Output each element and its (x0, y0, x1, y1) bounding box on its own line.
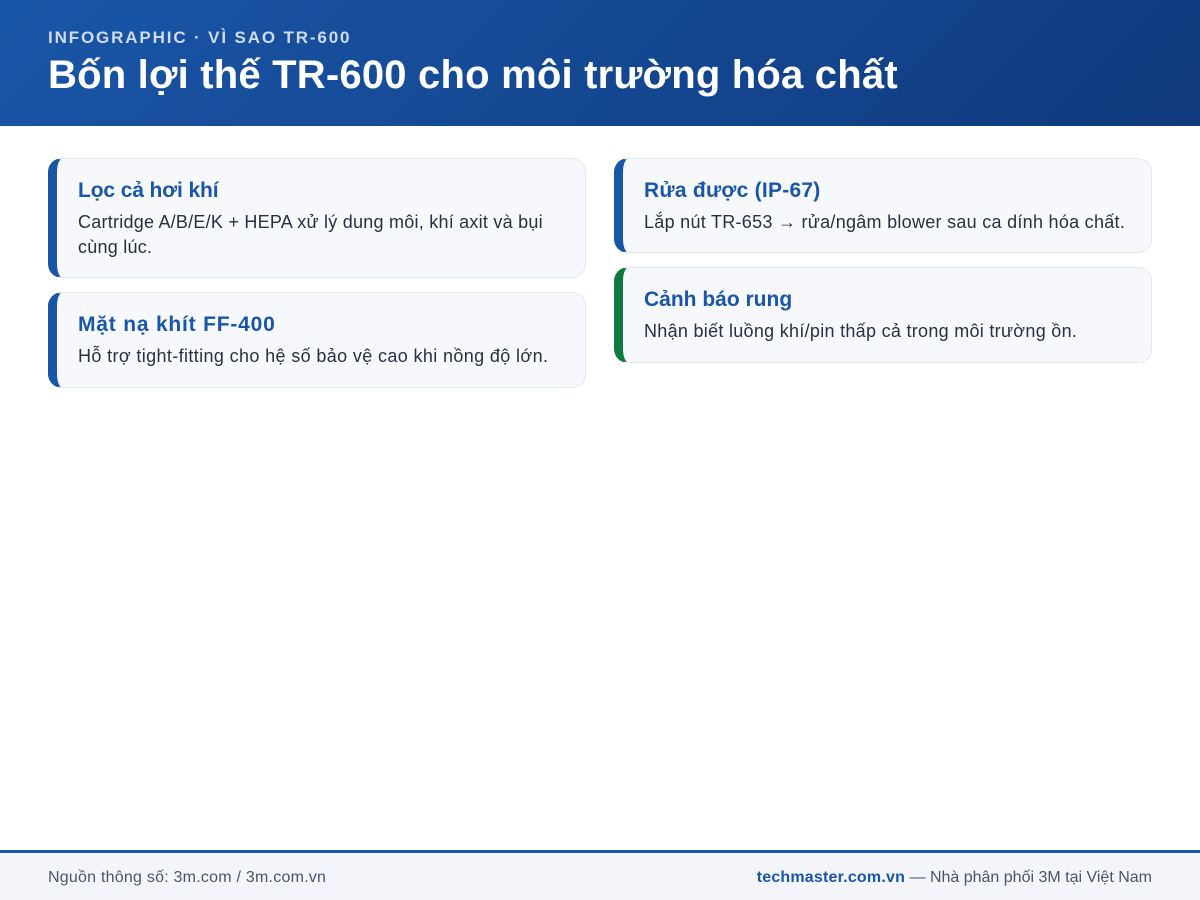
footer (0, 850, 1200, 900)
eyebrow: INFOGRAPHIC · VÌ SAO TR-600 (48, 28, 351, 47)
heading: mask: Mặt nạ khít FF-400 (78, 313, 276, 336)
text: washable: Lắp nút TR-653 → rửa/ngâm blower sau ca dính hóa chất. (644, 212, 1125, 232)
panel: FF-400 mask (48, 292, 586, 388)
heading: vibration: Cảnh báo rung (644, 288, 792, 311)
text: filter: Cartridge A/B/E/K + HEPA xử lý dung môi, khí axit và bụi (78, 212, 543, 232)
header banner (0, 0, 1200, 126)
heading: washable: Rửa được (IP-67) (644, 179, 821, 202)
text: filter (78, 212, 543, 257)
panel: washable (614, 158, 1152, 253)
text: filter: cùng lúc. (78, 236, 152, 256)
source note: Nguồn thông số: 3m.com / 3m.com.vn (48, 869, 326, 886)
text: mask: Hỗ trợ tight-fitting cho hệ số bảo vệ cao khi nồng độ lớn. (78, 346, 548, 366)
distributor note: techmaster.com.vn — Nhà phân phối 3M tại Việt Nam (757, 869, 1152, 886)
title: Bốn lợi thế TR-600 cho môi trường hóa chất (48, 53, 898, 97)
heading: filter: Lọc cả hơi khí (78, 179, 218, 202)
panel: vibration alert (614, 267, 1152, 363)
text: vibration: Nhận biết luồng khí/pin thấp cả trong môi trường ồn. (644, 321, 1077, 341)
panel: filter vapours and gases (48, 158, 586, 278)
